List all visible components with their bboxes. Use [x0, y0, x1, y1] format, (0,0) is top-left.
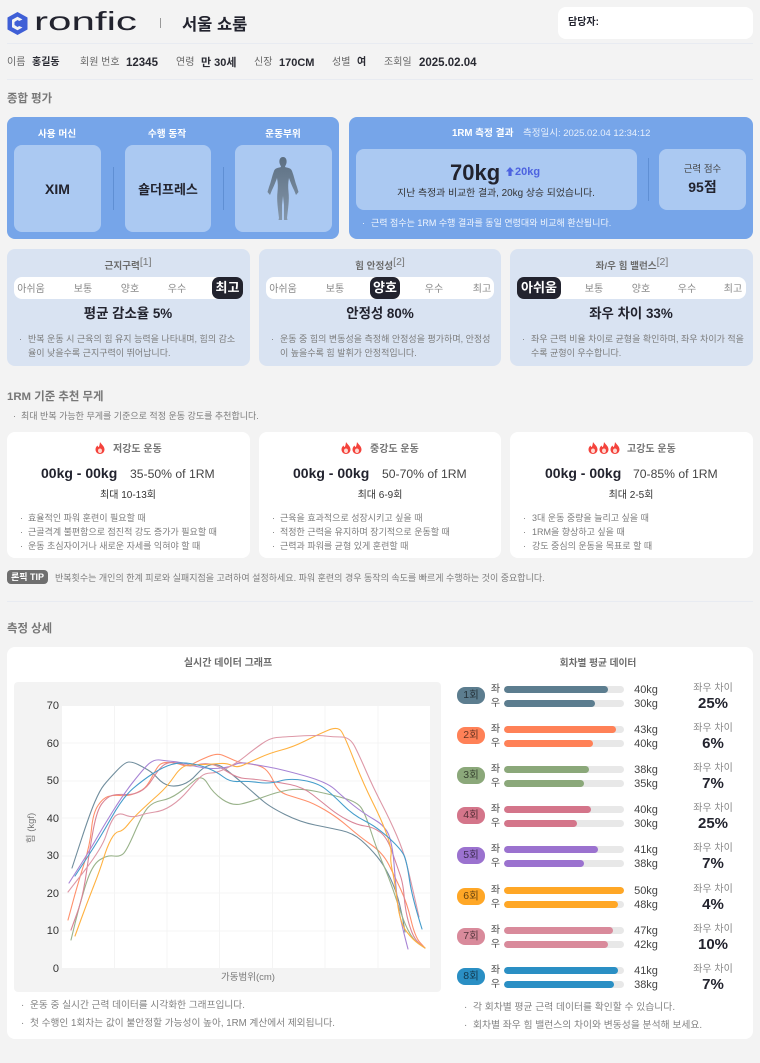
tip text: 반복횟수는 개인의 한계 피로와 실패지점을 고려하여 설정하세요. 파워 훈련의 경우 동작의 속도를 빠르게 수행하는 것이 중요합니다. [55, 573, 545, 583]
tile: machine [14, 145, 101, 232]
high intensity text: 70-85% of 1RM [633, 467, 718, 481]
heading: overall evaluation: 종합 평가 [7, 93, 52, 105]
session 5: 38kg [634, 858, 658, 870]
member info row: 이름 [7, 57, 25, 68]
balance description: 좌우 근력 비율 차이로 균형을 확인하며, 좌우 차이가 적을 [531, 334, 744, 344]
member info row: 홍길동 [32, 57, 60, 68]
session 6 [457, 883, 733, 912]
chart notes: · [21, 1018, 24, 1029]
session 6: 좌우 차이 [693, 884, 733, 894]
session 3: 35kg [634, 778, 658, 790]
session 7: 7회 [463, 930, 479, 942]
panel: power stability: 힘 안정성[2] [355, 256, 405, 272]
session 8: 7% [702, 976, 724, 993]
tile: 1RM value: 지난 측정과 비교한 결과, 20kg 상승 되었습니다. [397, 188, 595, 199]
high intensity text: · [523, 527, 526, 537]
session 7: 47kg [634, 924, 658, 936]
session 6: 48kg [634, 898, 658, 910]
rating scale: stability [266, 277, 494, 299]
session 7: 우 [491, 938, 500, 950]
session 8: 38kg [634, 979, 658, 991]
session 4: 좌 [491, 804, 500, 815]
table notes: · [464, 1002, 467, 1013]
session 6: 50kg [634, 884, 658, 896]
balance description: · [522, 334, 525, 344]
session 2 [457, 722, 733, 752]
member info row: 여 [357, 57, 366, 68]
session 2: 좌 [491, 724, 500, 735]
session 8 [457, 963, 733, 993]
member info row: 12345 [126, 57, 158, 69]
session 5: 7% [702, 855, 724, 872]
low intensity text: 효율적인 파워 훈련이 필요할 때 [28, 513, 146, 523]
column headers: 운동부위 [265, 129, 301, 140]
panel: medium intensity [259, 432, 501, 558]
tile: machine: XIM [45, 181, 70, 197]
session 8: 41kg [634, 965, 658, 977]
selected rating chip: 아쉬움 [521, 280, 557, 295]
selected rating chip [370, 277, 400, 299]
data curves [68, 728, 425, 949]
text: 보통 [74, 284, 92, 295]
medium intensity text: · [272, 541, 275, 551]
text: 우수 [425, 284, 443, 295]
panel: power stability [259, 249, 501, 366]
session 5: 5회 [463, 849, 479, 861]
member info row: 만 30세 [201, 57, 237, 69]
high intensity text: 고강도 운동 [627, 444, 676, 455]
session 1: 40kg [634, 684, 658, 696]
panel: measurement detail [7, 647, 753, 1039]
session 8: 8회 [463, 970, 479, 982]
session 6: 4% [702, 896, 724, 912]
text: 양호 [632, 284, 650, 295]
tile: strength score: 근력 점수 [684, 164, 721, 175]
member info row: 조회일 [384, 57, 412, 68]
session 7: 42kg [634, 938, 658, 950]
session 2: 좌우 차이 [693, 723, 733, 734]
tile: strength score [659, 149, 746, 210]
table notes: · [464, 1020, 467, 1031]
tile: 1RM value: 20kg [515, 166, 540, 178]
tile: exercise [125, 145, 211, 232]
medium intensity text: 중강도 운동 [370, 444, 419, 455]
session 3 [457, 762, 733, 792]
session 1: 1회 [463, 689, 479, 701]
session 1: 우 [491, 698, 500, 709]
high intensity text: 00kg - 00kg [545, 465, 621, 481]
panel: low intensity [7, 432, 250, 558]
session 2: 2회 [463, 729, 479, 741]
icon: human body figure [268, 157, 298, 220]
session 4: 25% [698, 815, 728, 832]
measured date: 측정일시: 2025.02.04 12:34:12 [523, 128, 650, 139]
session 5: 41kg [634, 844, 658, 856]
panel: machine, exercise, body part [7, 117, 339, 239]
high intensity text [523, 443, 718, 551]
high intensity text: 1RM을 향상하고 싶을 때 [532, 527, 625, 537]
low intensity text: 저강도 운동 [113, 444, 162, 455]
chart notes: 운동 중 실시간 근력 데이터를 시각화한 그래프입니다. [30, 1000, 245, 1011]
y axis labels: 50 [47, 775, 59, 787]
high intensity text: 최대 2-5회 [609, 490, 653, 501]
session 3: 좌 [491, 764, 500, 775]
stability description [271, 334, 490, 358]
medium intensity text: 근육을 효과적으로 성장시키고 싶을 때 [280, 513, 422, 523]
session 1: 좌우 차이 [693, 683, 733, 694]
session 2: 43kg [634, 724, 658, 736]
low intensity text: 근골격계 불편함으로 점진적 강도 증가가 필요할 때 [28, 527, 217, 537]
member info row [7, 56, 477, 69]
y axis labels: 20 [47, 888, 59, 900]
panel: high intensity [510, 432, 753, 558]
member info row: 신장 [254, 57, 272, 68]
session 3: 좌우 차이 [693, 763, 733, 774]
member info row: 성별 [332, 57, 350, 68]
panel: left right balance [510, 249, 753, 366]
medium intensity text [272, 443, 467, 551]
chart notes: 첫 수행인 1회차는 값이 불안정할 가능성이 높아, 1RM 계산에서 제외됩니다. [30, 1018, 335, 1029]
tile: exercise: 숄더프레스 [138, 182, 198, 197]
y axis title: 힘 (kgf) [26, 813, 37, 843]
panel: muscular endurance: 근지구력[1] [104, 256, 152, 272]
stability value: 안정성 80% [346, 306, 414, 321]
tip chip [7, 570, 48, 584]
medium intensity text: · [272, 513, 275, 523]
high intensity text: · [523, 541, 526, 551]
session 4: 좌우 차이 [693, 803, 733, 814]
header [8, 6, 753, 39]
x axis title: 가동범위(cm) [221, 971, 275, 983]
session 8: 좌 [491, 965, 500, 976]
y axis labels: 30 [47, 850, 59, 862]
result footnote: · [362, 218, 365, 228]
session 7 [457, 923, 733, 952]
endurance value: 평균 감소율 5% [84, 306, 172, 321]
member info row: 회원 번호 [80, 57, 120, 68]
stability description: 운동 중 힘의 변동성을 측정해 안정성을 평가하며, 안정성 [280, 334, 490, 344]
session 3: 38kg [634, 764, 658, 776]
table title: 회차별 평균 데이터 [560, 658, 636, 669]
session 7: 10% [698, 936, 728, 952]
high intensity text: 3대 운동 중량을 늘리고 싶을 때 [532, 513, 649, 523]
y axis labels [47, 700, 59, 975]
column headers: 수행 동작 [148, 129, 186, 140]
member info row: 연령 [176, 57, 194, 68]
low intensity text: · [20, 527, 23, 537]
text: 아쉬움 [17, 284, 45, 295]
line chart: realtime force [14, 682, 441, 992]
text: 보통 [326, 284, 344, 295]
y axis labels: 0 [53, 963, 59, 975]
high intensity text: 강도 중심의 운동을 목표로 할 때 [532, 541, 652, 551]
showroom title: 서울 쇼룸 [182, 16, 247, 34]
rating scale: balance [517, 277, 746, 299]
icon: ronfic logo [8, 12, 28, 35]
y axis labels: 70 [47, 700, 59, 712]
panel: 1RM result: 근력 점수는 1RM 수행 결과를 동일 연령대와 비교해 환산됩니다. [371, 218, 611, 228]
session 8: 우 [491, 979, 500, 990]
manager box [558, 7, 753, 39]
session 8: 좌우 차이 [693, 964, 733, 975]
icon: flame [96, 442, 104, 454]
session 2: 6% [702, 735, 724, 752]
endurance description: 율이 낮을수록 근지구력이 뛰어납니다. [28, 348, 170, 358]
selected rating chip: 양호 [373, 280, 397, 295]
text: 우수 [168, 284, 186, 295]
member info row: 170CM [279, 57, 314, 69]
text: 아쉬움 [269, 284, 297, 295]
medium intensity text: 최대 6-9회 [358, 490, 402, 501]
session 4: 30kg [634, 818, 658, 830]
y axis labels: 60 [47, 738, 59, 750]
text: 우수 [678, 284, 696, 295]
session 6: 6회 [463, 890, 479, 902]
low intensity text: 운동 초심자이거나 새로운 자세를 익혀야 할 때 [28, 541, 200, 551]
session 1: 좌 [491, 684, 500, 695]
table notes: 각 회차별 평균 근력 데이터를 확인할 수 있습니다. [473, 1002, 675, 1013]
text: 최고 [473, 284, 491, 295]
chart notes: · [21, 1000, 24, 1011]
session 6: 좌 [491, 884, 500, 896]
session 1: 30kg [634, 698, 658, 710]
low intensity text: · [20, 513, 23, 523]
medium intensity text: 00kg - 00kg [293, 465, 369, 481]
session 3: 우 [491, 778, 500, 789]
chart title: 실시간 데이터 그래프 [184, 658, 272, 669]
icon: two flames [342, 442, 362, 454]
endurance description: · [19, 334, 22, 344]
tile: 1RM value [356, 149, 637, 210]
session 4: 40kg [634, 804, 658, 816]
heading: measurement detail: 측정 상세 [7, 623, 52, 635]
column headers [38, 128, 301, 140]
table notes [464, 1002, 702, 1031]
balance description: 수록 균형이 우수합니다. [531, 348, 621, 358]
session 5 [457, 842, 733, 872]
tip chip: 론픽 TIP [11, 572, 44, 582]
medium intensity text: 적정한 근력을 유지하며 장기적으로 운동할 때 [280, 527, 450, 537]
tile: strength score: 95점 [688, 179, 717, 195]
medium intensity text: 근력과 파워를 균형 있게 훈련할 때 [280, 541, 408, 551]
rating scale: endurance [14, 277, 243, 299]
low intensity text: · [20, 541, 23, 551]
text: 최고 [724, 284, 742, 295]
balance description [522, 334, 744, 358]
selected rating chip [212, 277, 243, 299]
panel: left right balance: 좌/우 힘 밸런스[2] [596, 256, 668, 272]
low intensity text: 최대 10-13회 [100, 490, 156, 501]
session 4: 4회 [463, 809, 479, 821]
text: 보통 [585, 284, 603, 295]
session 6: 우 [491, 898, 500, 910]
y axis labels: 10 [47, 925, 59, 937]
column headers: 사용 머신 [38, 129, 76, 140]
session 3: 3회 [463, 769, 479, 781]
session 4: 우 [491, 818, 500, 829]
heading: recommended weight: 1RM 기준 추천 무게 [7, 391, 103, 403]
session 5: 좌 [491, 844, 500, 855]
session 5: 우 [491, 858, 500, 869]
session 1: 25% [698, 695, 728, 712]
session 4 [457, 802, 733, 832]
low intensity text: 35-50% of 1RM [130, 467, 215, 481]
endurance description [19, 334, 235, 358]
selected rating chip [517, 277, 561, 299]
medium intensity text: 50-70% of 1RM [382, 467, 467, 481]
recommendation subtitle: · 최대 반복 가능한 무게를 기준으로 적정 운동 강도를 추천합니다. [13, 411, 259, 421]
tile: body part [235, 145, 332, 232]
panel: muscular endurance [7, 249, 250, 366]
icon: three flames [588, 442, 620, 454]
session 1 [457, 682, 733, 712]
selected rating chip: 최고 [216, 280, 239, 295]
session 5: 좌우 차이 [693, 843, 733, 854]
panel: 1RM result [349, 117, 753, 239]
endurance description: 반복 운동 시 근육의 힘 유지 능력을 나타내며, 힘의 감소 [28, 334, 235, 344]
divider tick [160, 18, 161, 28]
manager box: 담당자: [568, 17, 599, 28]
tile: 1RM value: 70kg [450, 160, 500, 185]
stability description: · [271, 334, 274, 344]
result title: 1RM 측정 결과 [452, 128, 514, 139]
session 3: 7% [702, 775, 724, 792]
chart notes [21, 1000, 335, 1029]
table notes: 회차별 좌우 힘 밸런스의 차이와 변동성을 분석해 보세요. [473, 1020, 702, 1031]
icon: up arrow [506, 167, 514, 176]
high intensity text: · [523, 513, 526, 523]
text: 양호 [121, 284, 139, 295]
low intensity text: 00kg - 00kg [41, 465, 117, 481]
stability description: 이 높을수록 힘 발휘가 안정적입니다. [280, 348, 417, 358]
member info row: 2025.02.04 [419, 57, 477, 69]
medium intensity text: · [272, 527, 275, 537]
session 7: 좌 [491, 924, 500, 936]
low intensity text [20, 443, 217, 551]
logo wordmark: ronfic [34, 6, 137, 36]
y axis labels: 40 [47, 813, 59, 825]
session 2: 40kg [634, 738, 658, 750]
session 7: 좌우 차이 [693, 924, 733, 934]
session 2: 우 [491, 738, 500, 749]
balance value: 좌우 차이 33% [589, 306, 673, 321]
